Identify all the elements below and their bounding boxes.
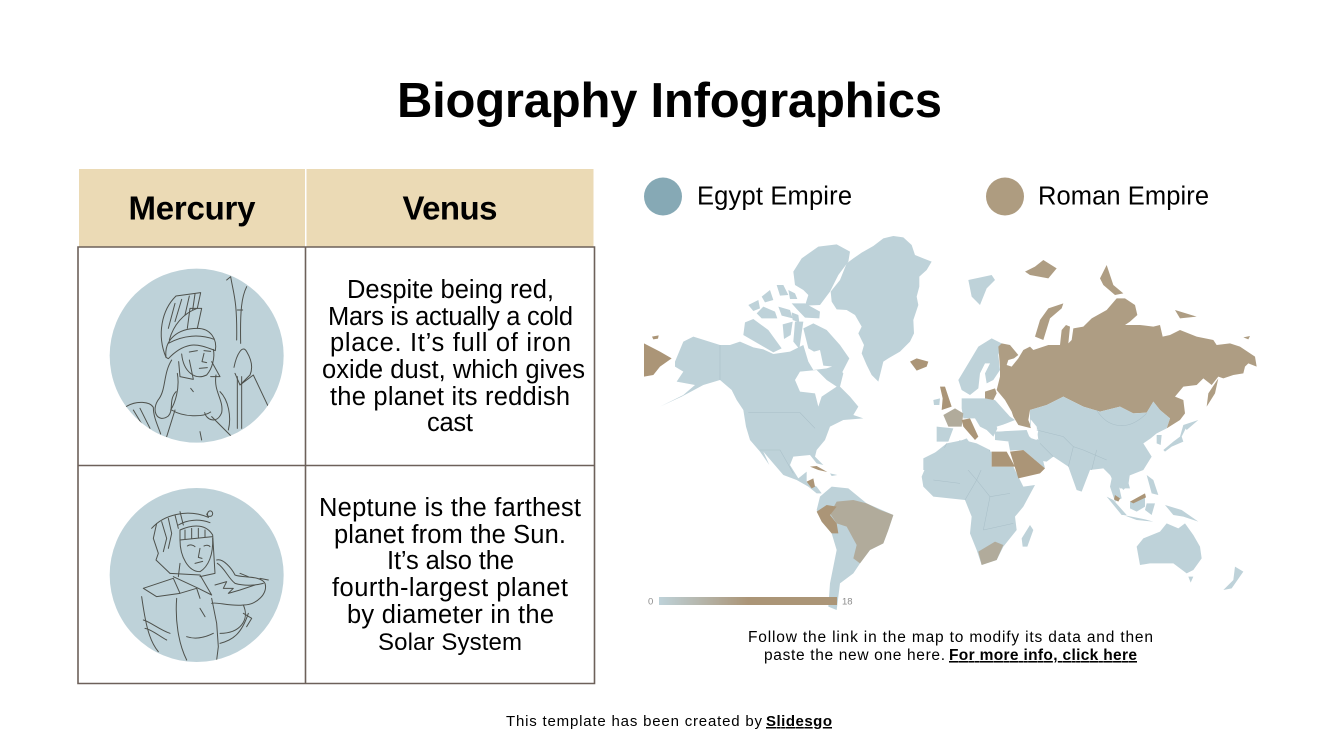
description: Mars: Despite being red,	[347, 276, 554, 304]
description: Mars: Mars is actually a cold	[328, 303, 573, 331]
description: Neptune: planet from the Sun.	[334, 521, 566, 549]
table grid	[78, 247, 594, 684]
description: Mars	[322, 276, 585, 437]
description: Mars: the planet its reddish	[330, 383, 570, 411]
description: Neptune: Neptune is the farthest	[319, 494, 581, 522]
world map	[644, 236, 1257, 610]
footer credit: This template has been created by	[506, 713, 762, 730]
table header: Venus	[306, 169, 594, 247]
table header: Venus: Venus	[402, 190, 498, 226]
map: East Asia islands	[1107, 420, 1198, 522]
description: Neptune: It’s also the	[387, 547, 514, 575]
map caption	[748, 629, 1153, 664]
description: Mars: place. It’s full of iron	[330, 329, 571, 357]
title: Biography Infographics	[397, 74, 942, 128]
map legend scale: 0	[648, 596, 653, 608]
map: Africa	[922, 275, 1035, 565]
footer credit: Slidesgo	[766, 713, 832, 730]
description: Neptune: fourth-largest planet	[332, 574, 568, 602]
legend: Egypt Empire	[644, 178, 852, 216]
map: Europe and Middle East	[923, 338, 1045, 478]
description: Mars: oxide dust, which gives	[322, 356, 585, 384]
map caption: Follow the link in the map to modify its data and then	[748, 629, 1153, 646]
description: Neptune: by diameter in the	[347, 601, 554, 629]
portrait: Egyptian woman with snake	[110, 488, 284, 662]
map caption: paste the new one here.	[764, 647, 945, 664]
legend: Roman Empire	[986, 178, 1209, 216]
legend: Egypt Empire: Egypt Empire	[697, 182, 852, 210]
map: Russia and Asia	[997, 260, 1257, 590]
description: Mars: cast	[427, 409, 473, 437]
description: Neptune: Solar System	[378, 629, 522, 656]
map caption: For more info, click here	[949, 647, 1137, 664]
table header: Mercury: Mercury	[128, 190, 256, 226]
table header: Mercury	[79, 169, 305, 247]
table	[78, 169, 594, 684]
map legend scale: 18	[842, 596, 853, 608]
legend: Roman Empire: Roman Empire	[1038, 182, 1209, 210]
description: Neptune	[319, 494, 581, 656]
map: Canadian Arctic islands	[743, 244, 850, 373]
map legend scale	[648, 596, 853, 608]
portrait: warrior with helmet and spear	[110, 269, 284, 443]
map: Americas	[644, 236, 932, 610]
